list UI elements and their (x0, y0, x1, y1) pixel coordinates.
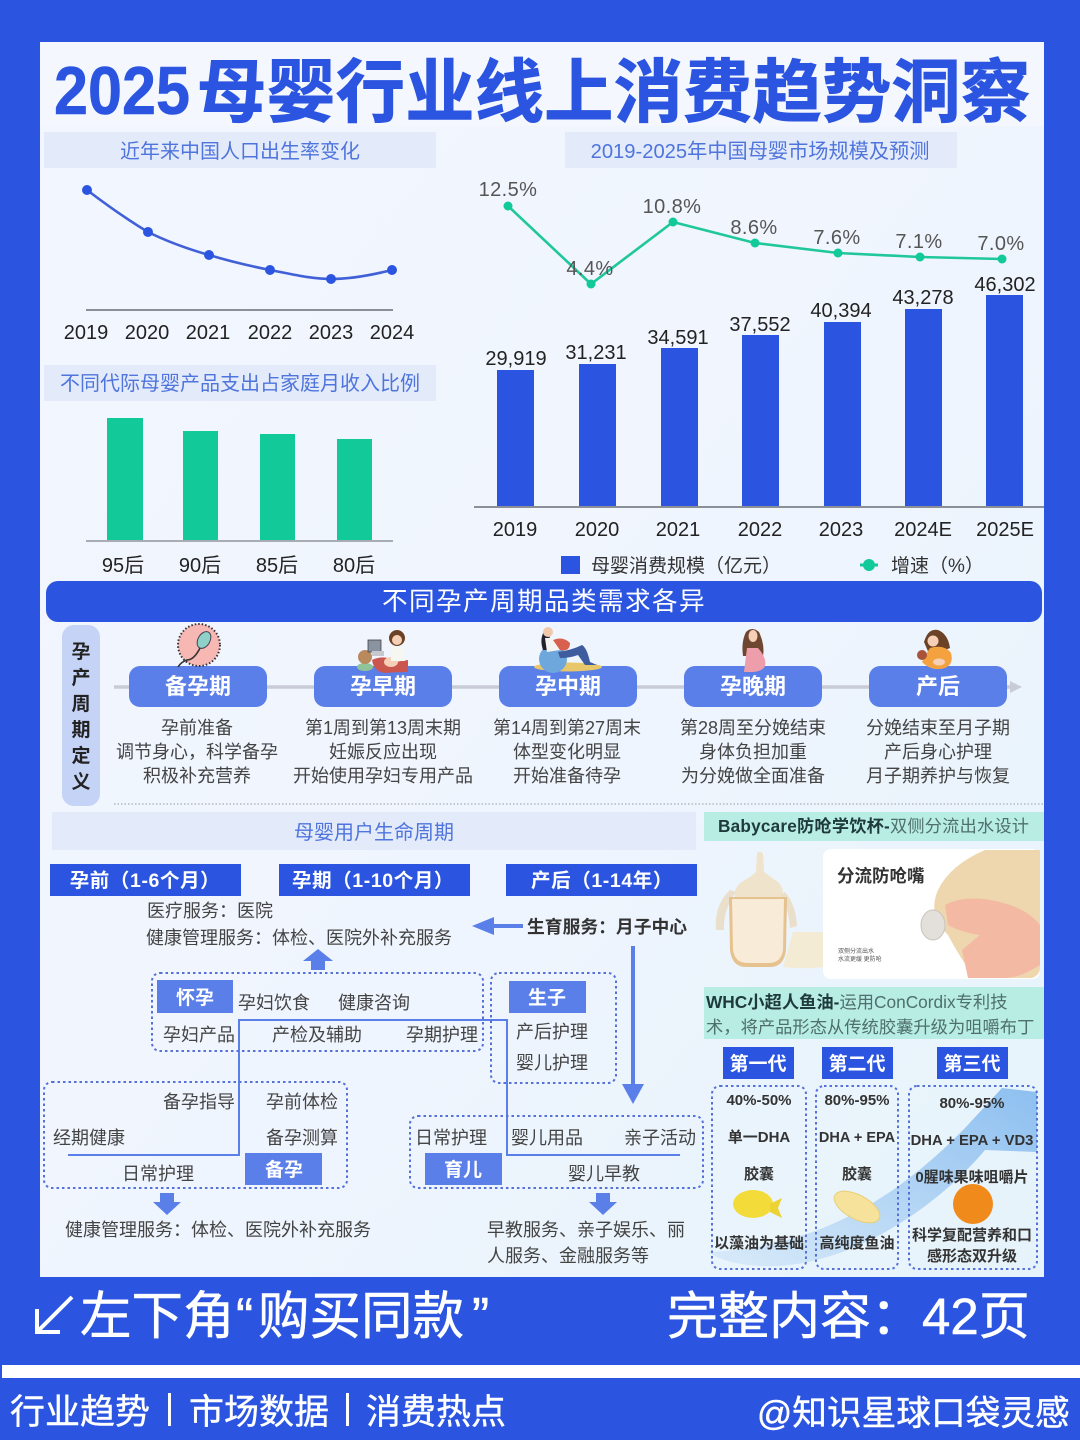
stage: 产后: 分娩结束至月子期 (866, 718, 1010, 738)
bar chart: spending share: 90后 (179, 554, 221, 577)
icon: fish capsule (733, 1190, 782, 1218)
timeline arrow (114, 681, 1022, 693)
arrow: up (303, 949, 333, 970)
heading: market size: 2019-2025年中国母婴市场规模及预测 (591, 140, 929, 163)
arrow: down left (153, 1193, 181, 1215)
stage: 孕中期: 体型变化明显 (513, 742, 621, 762)
service text: 健康管理服务：体检、医院外补充服务 (146, 928, 452, 948)
box: 怀孕: 孕期护理 (406, 1025, 478, 1045)
footer: buy prompt: 左下角 (80, 1287, 235, 1345)
banner heading: pregnancy stages (46, 581, 1042, 622)
heading: WHC: 术，将产品形态从传统胶囊升级为咀嚼布丁 (706, 1017, 1034, 1037)
box: 生子: 产后护理 (516, 1022, 588, 1042)
stage: 孕中期: 孕中期 (535, 674, 601, 699)
generation 2: DHA + EPA (819, 1130, 896, 1146)
stage: 孕早期: 第1周到第13周末期 (305, 718, 461, 738)
generation 1: 单一DHA (728, 1129, 790, 1146)
side label: 义 (71, 771, 91, 793)
box: 生子: 生子 (528, 987, 566, 1009)
side label: 定 (71, 744, 91, 767)
line chart: birth rate: 2019 (64, 322, 108, 344)
photo: spout close-up (823, 849, 1040, 979)
icon: arrow down-left (37, 1297, 72, 1332)
bar chart: market size: 34,591 (647, 327, 709, 349)
heading: spending share: 不同代际母婴产品支出占家庭月收入比例 (60, 372, 420, 395)
box: 育儿: 亲子活动 (624, 1128, 696, 1148)
box: 备孕: 备孕 (265, 1159, 303, 1181)
banner heading: pregnancy stages: 不同孕产周期品类需求各异 (382, 587, 706, 616)
icon: yoga ball (534, 627, 602, 673)
generation 1: 40%-50% (726, 1092, 792, 1109)
footer: buy prompt (37, 1287, 489, 1345)
box: 怀孕 (152, 973, 483, 1051)
box: 育儿: 婴儿早教 (568, 1164, 640, 1184)
panel: spending share chart (44, 365, 436, 577)
box: 育儿: 婴儿用品 (511, 1128, 583, 1148)
stage: 备孕期: 调节身心，科学备孕 (116, 742, 278, 762)
box: 育儿: 育儿 (444, 1158, 482, 1181)
service text (146, 901, 452, 948)
stage header: postpartum (506, 864, 697, 896)
generation 1: 胶囊 (744, 1165, 774, 1183)
photo: bottle (716, 852, 830, 968)
generation 3: DHA + EPA + VD3 (911, 1133, 1033, 1149)
line chart: growth rate: 7.0% (977, 233, 1025, 255)
line chart: growth rate: 7.1% (895, 231, 943, 253)
legend: （亿元） (705, 555, 781, 577)
bar chart: market size: 46,302 (974, 274, 1036, 296)
generation 3: 科学复配营养和口 (912, 1226, 1032, 1244)
line chart: birth rate: 2020 (125, 322, 169, 344)
line chart: growth rate: 10.8% (643, 196, 701, 218)
line chart: birth rate: 2024 (370, 322, 414, 344)
line chart: birth rate: 2023 (309, 322, 353, 344)
footer tags: 行业趋势 (10, 1393, 150, 1432)
heading: birth rate: 近年来中国人口出生率变化 (120, 140, 360, 163)
line chart: growth rate: 4.4% (566, 258, 614, 280)
legend: 增速 (891, 555, 929, 577)
box: 育儿 (410, 1116, 703, 1188)
upgrade arrow (708, 1088, 1037, 1266)
box: 怀孕: 孕妇饮食 (238, 993, 310, 1013)
stage: 产后: 产后身心护理 (884, 742, 992, 762)
footer handle: @知识星球口袋灵感 (757, 1394, 1070, 1433)
box: 怀孕: 怀孕 (176, 987, 214, 1009)
side label (62, 625, 100, 806)
stage header: pre-pregnancy: 孕前（1-6个月） (70, 870, 220, 892)
title: 2025 (54, 53, 190, 129)
generation 2: 80%-95% (824, 1092, 890, 1109)
generation 2: 第二代 (828, 1053, 886, 1075)
box: 备孕: 备孕测算 (266, 1128, 338, 1148)
stage header: pre-pregnancy (50, 864, 241, 896)
arrow: left to birth services (472, 917, 523, 935)
generation 3: 第三代 (943, 1053, 1001, 1075)
bar chart: spending share (86, 418, 393, 577)
generation 3: 80%-95% (939, 1095, 1005, 1112)
icon: pregnant woman (742, 629, 765, 672)
bar chart: market size: 43,278 (892, 287, 954, 309)
stage: 产后: 产后 (916, 674, 960, 699)
panel: user lifecycle (44, 812, 703, 1266)
title: 母婴行业线上消费趋势洞察 (197, 54, 1030, 131)
box: 备孕: 经期健康 (53, 1128, 125, 1148)
bar chart: spending share: 95后 (102, 554, 144, 577)
icon: orange chew (953, 1184, 993, 1224)
bar chart: market size: 2023 (819, 519, 863, 541)
generation 3: 感形态双升级 (927, 1247, 1017, 1265)
legend: 母婴消费规模 (591, 555, 705, 577)
stage: 孕中期 (493, 666, 641, 786)
box: 备孕: 日常护理 (122, 1164, 194, 1184)
heading: spending share (44, 365, 436, 401)
outcome text left: 健康管理服务：体检、医院外补充服务 (65, 1220, 371, 1240)
footer: buy prompt: “ (236, 1287, 253, 1345)
side label: 产 (71, 667, 91, 689)
bar chart: market size: 2021 (656, 519, 700, 541)
heading: Babycare (704, 812, 1044, 841)
stage: 孕晚期: 孕晚期 (720, 674, 786, 699)
side label: 期 (71, 719, 91, 741)
panel: birth rate chart (44, 132, 436, 344)
stage: 孕中期: 开始准备待孕 (513, 766, 621, 786)
box: 怀孕: 产检及辅助 (272, 1025, 362, 1045)
heading: lifecycle (52, 812, 696, 850)
box: 生子 (491, 973, 616, 1083)
stage: 备孕期: 孕前准备 (161, 718, 233, 738)
stage: 孕早期: 妊娠反应出现 (329, 742, 437, 762)
footer tags (10, 1393, 506, 1432)
stage header: pregnancy: 孕期（1-10个月） (292, 870, 454, 892)
line chart: growth rate: 7.6% (813, 227, 861, 249)
bar chart: market size: 2019 (493, 519, 537, 541)
footer tags: 市场数据 (189, 1393, 329, 1432)
heading: market size (565, 132, 957, 168)
icon: sperm (178, 624, 220, 667)
icon: softgel (829, 1185, 885, 1229)
panel: pregnancy stage definitions (62, 624, 1022, 806)
stage: 孕晚期 (680, 666, 826, 786)
stage: 孕晚期: 第28周至分娩结束 (680, 718, 826, 738)
legend (561, 555, 984, 577)
generation 1: 以藻油为基础 (714, 1234, 804, 1252)
footer tags: 消费热点 (366, 1393, 506, 1432)
bar chart: spending share: 80后 (333, 554, 375, 577)
outcome text right: 人服务、金融服务等 (487, 1246, 649, 1266)
heading: birth rate (44, 132, 436, 168)
arrow: down (622, 946, 644, 1104)
heading: WHC: WHC小超人鱼油-运用ConCordix专利技 (706, 992, 1007, 1012)
stage: 孕早期: 孕早期 (350, 674, 416, 699)
footer: buy prompt: 购买同款 (258, 1287, 464, 1345)
generation 1: 第一代 (729, 1053, 787, 1075)
bar chart: market size: 40,394 (810, 300, 872, 322)
bar chart: market size: 37,552 (729, 314, 791, 336)
line chart: birth rate: 2021 (186, 322, 230, 344)
footer: page count: 完整内容：42页 (667, 1288, 1030, 1345)
generation 1 (712, 1047, 806, 1269)
box: 备孕 (44, 1082, 347, 1188)
stage: 孕中期: 第14周到第27周末 (493, 718, 641, 738)
box: 育儿: 日常护理 (415, 1128, 487, 1148)
panel: market size chart (474, 132, 1044, 577)
main panel (40, 42, 1044, 1277)
bar chart: spending share: 85后 (256, 554, 298, 577)
generation 2: 胶囊 (842, 1165, 872, 1183)
heading: WHC (704, 987, 1044, 1039)
line chart: birth rate: 2022 (248, 322, 292, 344)
bar chart: market size (474, 274, 1044, 541)
line chart: growth rate: 12.5% (479, 179, 537, 201)
generation 2 (816, 1047, 898, 1269)
stage: 备孕期: 积极补充营养 (143, 766, 251, 786)
arrow: down right (589, 1193, 617, 1215)
stage header: postpartum: 产后（1-14年） (531, 869, 673, 892)
outcome text right: 早教服务、亲子娱乐、丽 (487, 1220, 685, 1240)
stage: 产后 (866, 666, 1010, 786)
icon: ultrasound check (357, 630, 408, 673)
bar chart: market size: 29,919 (485, 348, 547, 370)
service text: 医疗服务：医院 (147, 901, 273, 921)
birth service text: 生育服务：月子中心 (527, 916, 687, 937)
stage: 备孕期 (116, 666, 278, 786)
stage header: pregnancy (279, 864, 470, 896)
stage: 孕早期 (293, 666, 473, 786)
box: 怀孕: 健康咨询 (338, 993, 410, 1013)
bar chart: market size: 31,231 (565, 342, 627, 364)
heading: Babycare: Babycare防呛学饮杯-双侧分流出水设计 (718, 816, 1029, 836)
box: 备孕: 孕前体检 (266, 1092, 338, 1112)
photo: spout close-up: 水流更缓 更防呛 (838, 955, 882, 963)
outcome text right (487, 1220, 685, 1266)
footer: buy prompt: ” (472, 1287, 489, 1345)
panel: WHC fish oil (704, 987, 1044, 1269)
bar chart: market size: 2020 (575, 519, 619, 541)
heading: lifecycle: 母婴用户生命周期 (294, 821, 454, 844)
box: 生子: 婴儿护理 (516, 1053, 588, 1073)
line chart: growth rate (479, 179, 1025, 288)
photo: spout close-up: 双侧分流出水 (838, 947, 874, 955)
line chart: birth rate (64, 185, 414, 344)
stage: 孕早期: 开始使用孕妇专用产品 (293, 766, 473, 786)
legend: （%） (929, 555, 984, 577)
connecting line (68, 1020, 680, 1155)
box: 备孕: 备孕指导 (163, 1092, 235, 1112)
photo: spout close-up: 分流防呛嘴 (837, 866, 924, 886)
generation 3 (909, 1047, 1037, 1269)
bar chart: market size: 2025E (976, 519, 1034, 541)
bar chart: market size: 2024E (894, 519, 952, 541)
side label: 孕 (71, 642, 91, 663)
bar chart: market size: 2022 (738, 519, 782, 541)
stage: 备孕期: 备孕期 (165, 674, 231, 699)
stage: 孕晚期: 身体负担加重 (699, 742, 807, 762)
generation 3: 0腥味果味咀嚼片 (915, 1169, 1029, 1186)
box: 怀孕: 孕妇产品 (163, 1025, 235, 1045)
icon: mother and baby (917, 630, 952, 669)
generation 2: 高纯度鱼油 (819, 1234, 895, 1252)
stage: 产后: 月子期养护与恢复 (866, 766, 1010, 786)
stage: 孕晚期: 为分娩做全面准备 (681, 766, 825, 786)
panel: Babycare cup (704, 812, 1044, 979)
side label: 周 (71, 694, 91, 715)
line chart: growth rate: 8.6% (730, 217, 778, 239)
